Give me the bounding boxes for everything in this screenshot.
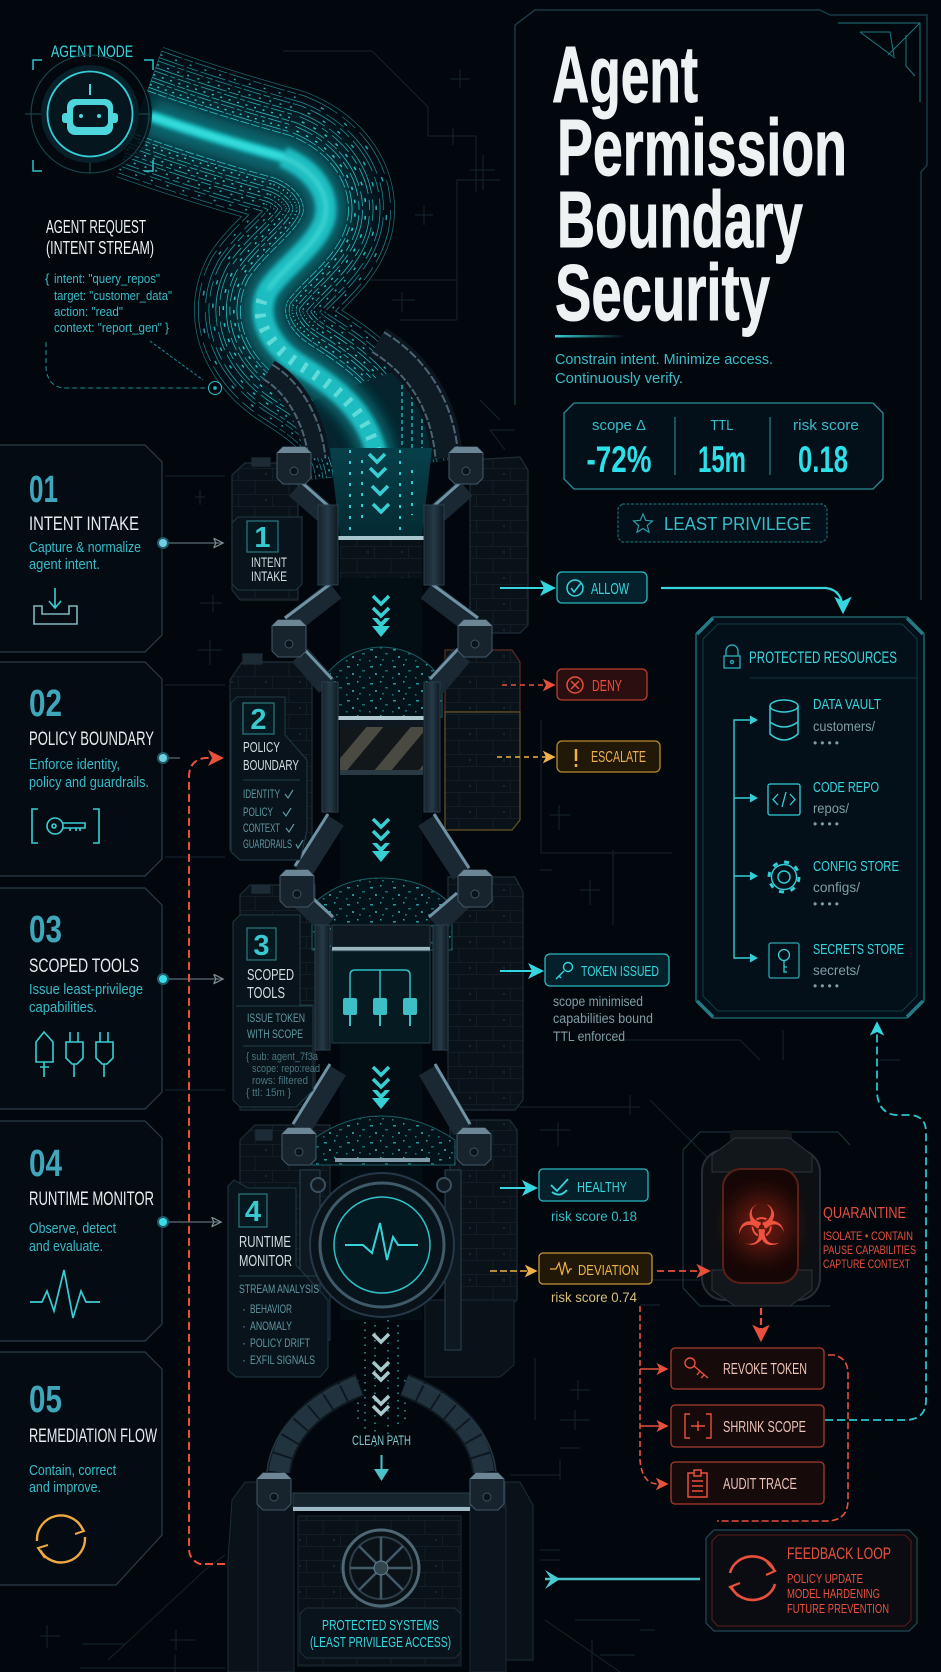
connector 01 [158,538,222,548]
arrow to quarantine [657,1270,709,1272]
title: Agent [552,30,698,119]
card 03 scoped tools: Issue least-privilege [29,981,143,998]
stage label 3: 3 [253,930,270,962]
allow arrow to resources [661,588,843,612]
stage label 3: SCOPED [247,967,294,984]
stage label 3: rows: filtered [252,1075,308,1087]
agent node [25,42,153,176]
stream side rails [268,342,447,458]
protected systems label [300,1608,461,1658]
allow decision: ALLOW [591,581,630,598]
subtitle: Constrain intent. Minimize access. [555,351,773,368]
stage label 2: POLICY [243,805,273,819]
healthy status: HEALTHY [577,1179,627,1196]
shrink scope action [671,1405,824,1447]
card 05 remediation flow: REMEDIATION FLOW [29,1426,157,1447]
title panel [515,10,927,600]
remediation bus [640,1306,667,1484]
card 02 policy boundary: Enforce identity, [29,756,120,773]
lower stream [358,1318,405,1450]
stage label 3: ISSUE TOKEN [247,1011,305,1025]
lock icon [724,645,740,668]
subtitle [555,351,773,387]
stage label 3: WITH SCOPE [247,1027,303,1041]
resource: data vault: DATA VAULT [813,696,881,713]
stage label 1: INTAKE [251,568,287,584]
token notes: TTL enforced [553,1028,625,1044]
deny decision [502,669,647,700]
stat: ttl: 15m [698,439,746,480]
stage label 4: STREAM ANALYSIS [239,1282,319,1296]
token issued decision [500,954,669,1044]
revoke token action: REVOKE TOKEN [723,1361,807,1378]
card 01 intent intake [0,445,162,652]
card 05 remediation flow: 05 [29,1379,62,1421]
card 03 scoped tools: SCOPED TOOLS [29,956,139,977]
quarantine text: CAPTURE CONTEXT [823,1257,910,1271]
card 01 intent intake: agent intent. [29,556,100,573]
healthy status [500,1169,648,1224]
icon: key in brackets [32,809,99,843]
stage label 4: · [242,1319,246,1333]
card 02 policy boundary: POLICY BOUNDARY [29,729,154,750]
vault wheel [343,1530,419,1606]
stage label 3: { sub: agent_7f3a [246,1051,319,1063]
card 04 runtime monitor: 04 [29,1143,62,1185]
resource: code repo: CODE REPO [813,779,879,796]
resource: secrets store: SECRETS STORE [813,941,904,958]
card 01 intent intake: Capture & normalize [29,539,141,556]
chevrons [372,596,390,1109]
stage label 4 [228,1180,328,1377]
resource: config store: •••• [813,897,839,911]
columns [300,505,461,1350]
card 03 scoped tools [0,888,162,1109]
vault arch [267,1380,496,1472]
card 04 runtime monitor: and evaluate. [29,1238,103,1255]
icon: intake tray [34,588,77,624]
dashed loop right of actions [717,1355,848,1521]
request connector [46,341,222,394]
escalate decision: ESCALATE [591,749,646,766]
protected resources panel [696,617,924,1018]
token notes: capabilities bound [553,1010,653,1026]
biohazard symbol: ☣ [736,1194,787,1259]
quarantine module [683,1130,916,1306]
feedback loop panel: MODEL HARDENING [787,1587,880,1601]
deviation status [490,1253,652,1305]
stage label 4: 4 [245,1196,261,1228]
stat: risk score: 0.18 [798,439,848,480]
agent request block: intent: "query_repos" [54,271,160,286]
stage label 1 [232,517,302,590]
intent stream [140,112,440,470]
shrink scope action: SHRINK SCOPE [723,1419,806,1436]
agent request block: { [45,271,50,286]
stage label 4: ANOMALY [250,1319,292,1333]
quarantine text: QUARANTINE [823,1205,906,1222]
vault body [228,1473,533,1672]
card 04 runtime monitor: Observe, detect [29,1220,117,1237]
icon: pulse [30,1270,100,1318]
resource: code repo: repos/ [813,800,849,816]
brackets and knuckles [272,447,492,1165]
stat: risk score: risk score [793,417,859,434]
stage label 3: scope: repo:read [252,1063,320,1075]
arrow down to actions [760,1308,762,1340]
card 02 policy boundary: policy and guardrails. [29,774,149,791]
deviation status: DEVIATION [578,1262,639,1279]
step connectors [158,538,222,1227]
stage label 4: RUNTIME [239,1234,291,1251]
icon: plugs [36,1032,113,1077]
quarantine capsule [702,1130,820,1306]
resource: data vault: customers/ [813,718,875,734]
central tower [228,445,533,1672]
icon: loop [730,1556,775,1600]
stat: scope: -72% [586,439,652,480]
stage label 4: EXFIL SIGNALS [250,1353,315,1367]
vault output arrow [545,1570,700,1589]
stat: scope [586,417,652,480]
feedback loop panel: FEEDBACK LOOP [787,1544,891,1563]
stage label 4: · [242,1302,246,1316]
clean path label [352,1432,411,1481]
agent node label: AGENT NODE [51,42,133,61]
feedback loop panel [706,1530,917,1631]
monitor gauge [310,1158,454,1317]
stage label 2: CONTEXT [243,821,280,835]
card 01 intent intake: INTENT INTAKE [29,514,139,535]
struts [285,481,478,1130]
card 05 remediation flow [0,1352,162,1585]
card 03 scoped tools: capabilities. [29,999,97,1016]
title rule [555,335,625,338]
agent request block: (INTENT STREAM) [46,238,154,258]
stage label 4: · [242,1336,246,1350]
card 05 remediation flow: Contain, correct [29,1462,117,1479]
subtitle: Continuously verify. [555,370,683,387]
channel [340,450,422,1320]
side blocks [230,457,528,1377]
audit trace action: AUDIT TRACE [723,1476,797,1493]
allow decision [500,572,647,603]
resource: code repo [768,779,879,831]
audit trace action [671,1462,824,1504]
stage label 3: { ttl: 15m } [246,1087,291,1099]
stage label 2: IDENTITY [243,787,280,801]
resource: code repo: •••• [813,817,839,831]
title [552,30,847,337]
stat: scope: scope Δ [592,417,646,434]
robot icon [62,84,118,135]
stage label 2 [231,697,307,860]
title: Boundary [557,175,803,264]
least privilege badge [618,504,827,542]
teal return dashed arrow [825,1023,926,1420]
stat: risk score [793,417,859,480]
deny decision: DENY [592,678,622,695]
protected systems label: (LEAST PRIVILEGE ACCESS) [310,1634,451,1651]
stage label 2: GUARDRAILS [243,837,292,851]
stage label 4: · [242,1353,246,1367]
stage label 4: POLICY DRIFT [250,1336,310,1350]
stat: ttl: TTL [710,417,734,434]
particle pools [312,647,455,1165]
target brackets [33,60,153,171]
stage label 4: MONITOR [239,1253,292,1270]
resource: data vault: •••• [813,736,839,750]
corner ornament [838,23,920,102]
resource: config store: CONFIG STORE [813,858,899,875]
healthy status: risk score 0.18 [551,1208,637,1224]
stage label 1: 1 [254,522,271,554]
card 01 intent intake: 01 [29,469,58,511]
card 04 runtime monitor: RUNTIME MONITOR [29,1189,154,1210]
stage label 3 [233,915,320,1107]
stage label 1: INTENT [251,554,287,570]
stage label 2: 2 [250,704,267,736]
resource: secrets store [769,941,904,993]
agent request block: action: "read" [54,304,123,319]
token notes: scope minimised [553,993,643,1009]
card 03 scoped tools: 03 [29,909,62,951]
agent request block [45,217,222,394]
red feedback dashed line [189,758,225,1564]
card 04 runtime monitor [0,1121,162,1341]
feedback loop panel: FUTURE PREVENTION [787,1602,889,1616]
quarantine text: ISOLATE • CONTAIN [823,1229,913,1243]
protected systems label: PROTECTED SYSTEMS [322,1617,439,1634]
stats panel [564,403,883,489]
resource: config store: configs/ [813,879,860,895]
node rings [25,55,150,173]
title: Security [555,248,770,337]
gate 1 [338,536,424,578]
token notes [553,993,653,1044]
resource: secrets store: •••• [813,979,839,993]
resource: config store [769,858,899,911]
feedback loop panel: POLICY UPDATE [787,1572,863,1586]
token issued decision: TOKEN ISSUED [581,963,659,980]
resource: secrets store: secrets/ [813,962,860,978]
escalate decision [497,741,660,772]
resource tree [734,720,756,958]
agent request block: AGENT REQUEST [46,217,146,237]
connector 04 [158,1217,220,1227]
agent request block: context: "report_gen" } [54,320,170,335]
connector 02 [158,753,180,763]
revoke token action [671,1348,824,1389]
gate 2 hazard [338,716,424,775]
agent request block: target: "customer_data" [54,288,172,303]
stage label 3: TOOLS [247,985,285,1002]
icon: cycle [37,1515,85,1562]
connector 03 [158,974,222,984]
stat: ttl [698,417,746,480]
least privilege badge: LEAST PRIVILEGE [664,514,811,534]
card 02 policy boundary [0,662,162,876]
stage label 2: POLICY [243,739,280,756]
stage label 2: BOUNDARY [243,757,299,774]
gate 3 plug panel [332,925,430,1043]
stage label 4: BEHAVIOR [250,1302,292,1316]
deviation status: risk score 0.74 [551,1289,637,1305]
quarantine text [823,1205,916,1271]
resource: data vault [770,696,881,750]
card 02 policy boundary: 02 [29,683,62,725]
clean path label: CLEAN PATH [352,1432,411,1448]
chamber 1 lit channel [330,445,432,537]
card 05 remediation flow: and improve. [29,1479,101,1496]
